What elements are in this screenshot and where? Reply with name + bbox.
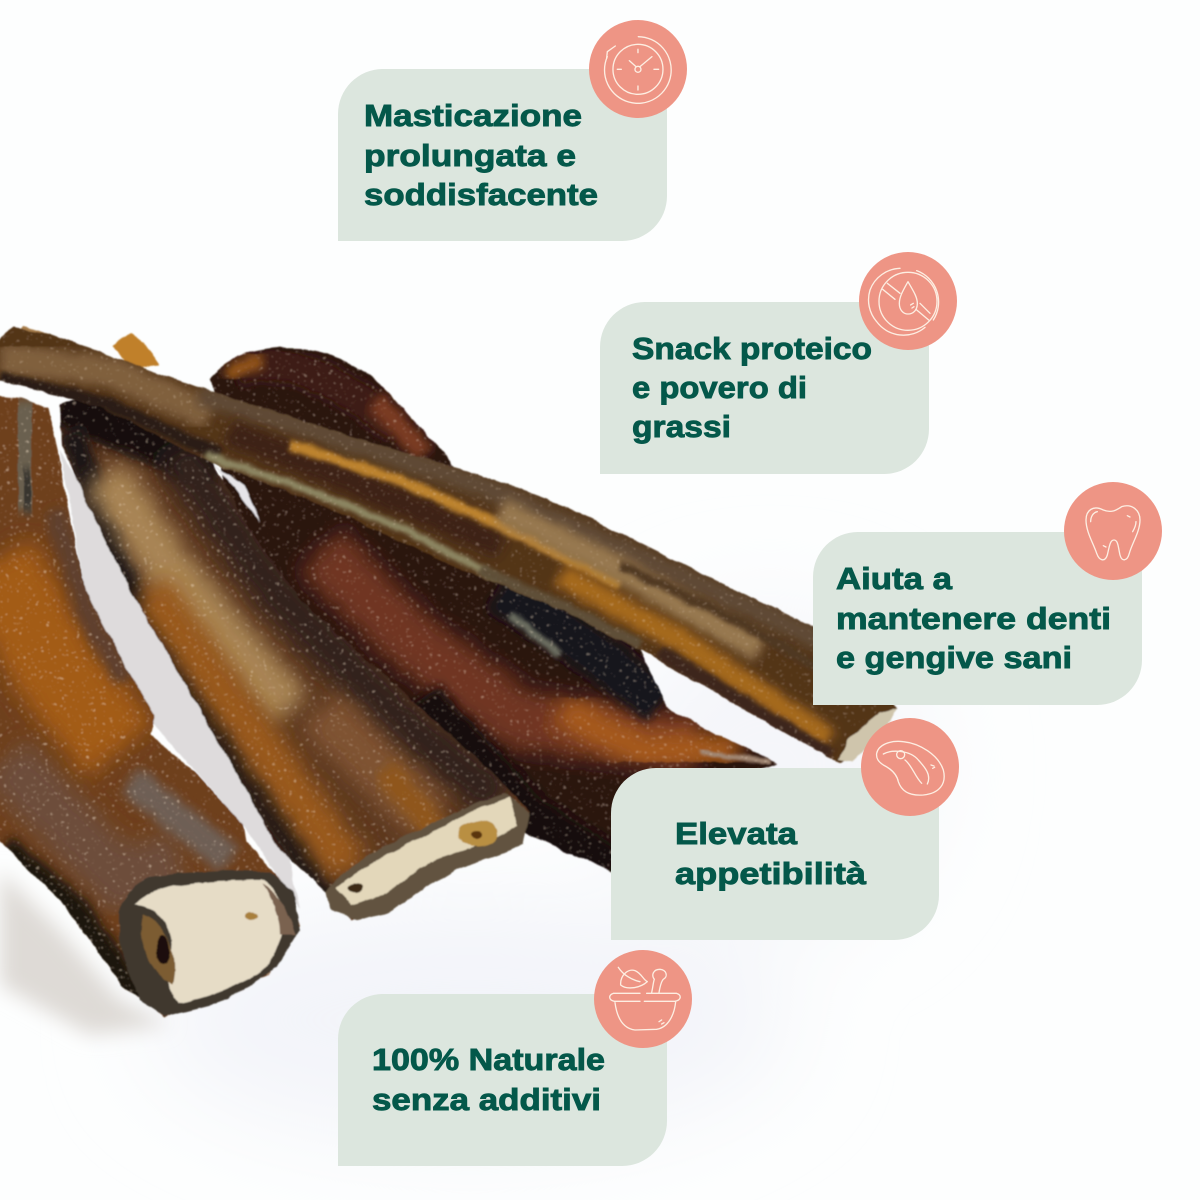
stick A: left	[0, 390, 310, 1030]
panel: protein	[600, 252, 957, 474]
heading: e gengive sani	[836, 640, 1072, 675]
heading: senza additivi	[372, 1082, 601, 1117]
panel background	[338, 69, 667, 241]
gap between sticks	[60, 450, 300, 910]
heading	[632, 331, 872, 444]
heading	[675, 816, 867, 891]
icon: mortar and leaf	[594, 950, 692, 1048]
stick B: middle	[50, 390, 550, 930]
tan tip behind stick D	[8, 326, 90, 360]
cut end of stick B	[326, 793, 530, 920]
stick D: long top	[0, 320, 900, 770]
panel: teeth	[813, 482, 1162, 705]
panel background	[813, 532, 1142, 705]
heading	[836, 561, 1111, 675]
icon: meat	[861, 718, 959, 816]
heading: Elevata	[675, 816, 798, 851]
panel background	[611, 768, 939, 940]
cut end of stick D	[838, 708, 898, 762]
cut end of stick A	[119, 870, 300, 1016]
heading: mantenere denti	[836, 601, 1111, 636]
icon: no-fat drop	[859, 252, 957, 350]
small orange tip	[112, 332, 160, 368]
heading: soddisfacente	[364, 177, 598, 212]
heading	[364, 98, 598, 212]
heading: grassi	[632, 409, 731, 444]
panel background	[338, 994, 667, 1166]
heading: Masticazione	[364, 98, 582, 133]
heading: e povero di	[632, 370, 807, 405]
heading: appetibilità	[675, 856, 867, 891]
panel: chewing	[338, 20, 687, 241]
stick C: back	[200, 340, 800, 880]
shadow left of stick A	[0, 870, 170, 1035]
photo: dried beef sticks	[0, 320, 900, 1030]
heading	[372, 1042, 605, 1117]
panel background	[600, 302, 929, 474]
panel: palatability	[611, 718, 959, 940]
heading: Snack proteico	[632, 331, 872, 366]
panel: natural	[338, 950, 692, 1166]
icon: tooth	[1064, 482, 1162, 580]
icon: clock	[589, 20, 687, 118]
background tint	[150, 610, 930, 1140]
heading: 100% Naturale	[372, 1042, 605, 1077]
heading: prolungata e	[364, 138, 576, 173]
white sliver between sticks	[213, 463, 260, 522]
heading: Aiuta a	[836, 561, 953, 596]
